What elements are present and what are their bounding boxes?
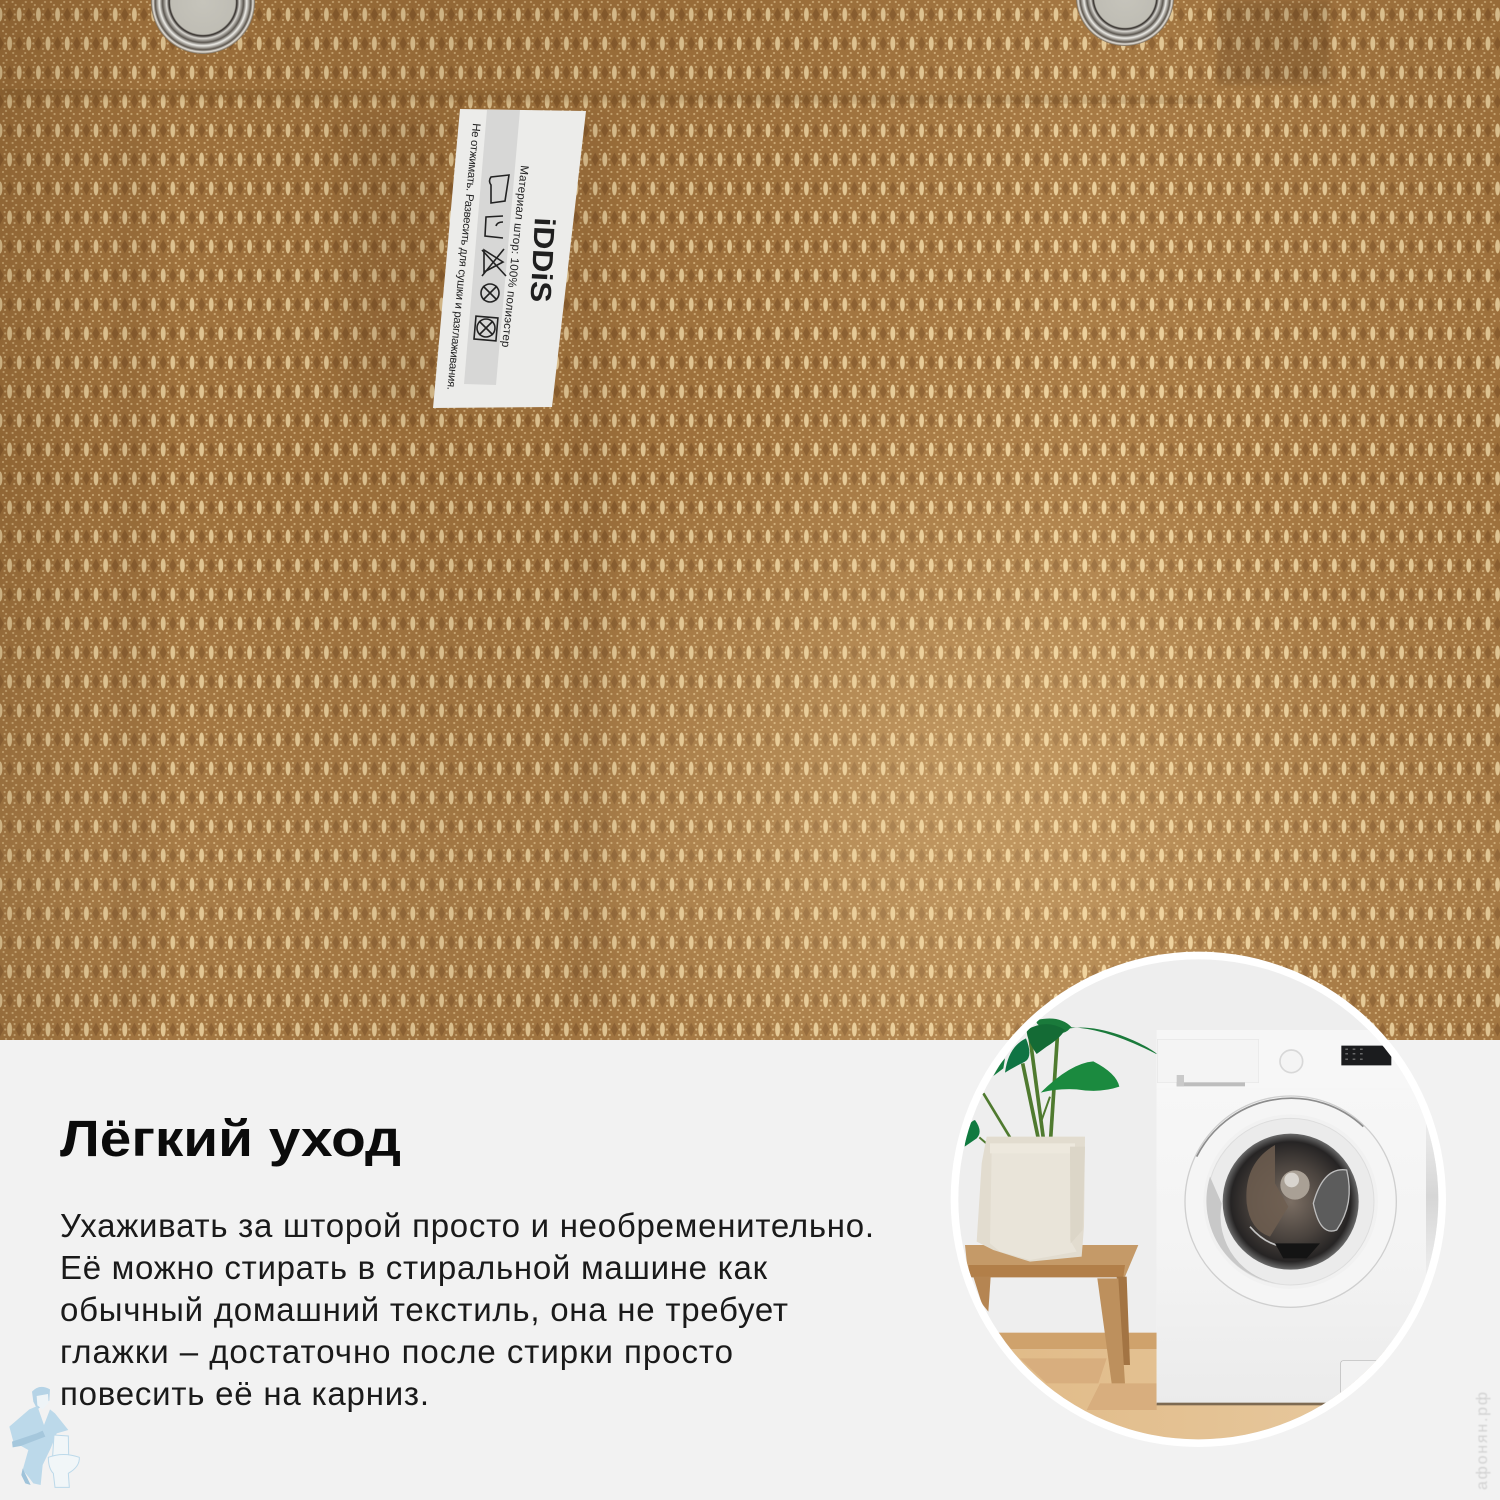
drum glass (1223, 1134, 1359, 1270)
bottom text panel (0, 1040, 1500, 1500)
canvas bag (977, 1137, 1085, 1262)
circular photo: washing machine (950, 950, 1450, 1450)
plumber logo watermark (9, 1387, 79, 1487)
label care icons (474, 175, 509, 341)
heading: Лёгкий уход (60, 1110, 401, 1167)
control panel (1156, 1054, 1157, 1055)
washing machine (1157, 1030, 1446, 1405)
service hatch (1340, 1360, 1376, 1392)
body text (60, 1207, 874, 1412)
body text: глажки – достаточно после стирки просто (60, 1333, 733, 1370)
wall (958, 960, 1368, 1332)
fabric background (0, 0, 1500, 1040)
body text: Ухаживать за шторой просто и необременительно. (60, 1207, 874, 1244)
door (1185, 1096, 1396, 1307)
label material text: Материал штор: 100% полиэстер (499, 165, 530, 348)
body text: повесить её на карниз. (60, 1375, 429, 1412)
label care instructions: Не отжимать. Развесить для сушки и разглаживания. (444, 123, 482, 391)
plant (965, 1019, 1158, 1150)
detergent drawer (1157, 1039, 1259, 1083)
dial (1280, 1050, 1303, 1073)
metal eyelet right (1076, 0, 1174, 46)
display (1341, 1046, 1391, 1065)
body text: Её можно стирать в стиральной машине как (60, 1249, 768, 1286)
metal eyelet left (151, 0, 255, 54)
body text: обычный домашний текстиль, она не требует (60, 1291, 788, 1328)
body front (1156, 1332, 1382, 1403)
floor and skirting (998, 1332, 1384, 1440)
care label (433, 109, 586, 408)
label grey strip (464, 110, 520, 385)
site watermark: афонян.рф (1474, 1392, 1491, 1490)
white ring (951, 952, 1446, 1447)
stool (965, 1245, 1138, 1383)
label brand: iDDiS (524, 217, 560, 303)
